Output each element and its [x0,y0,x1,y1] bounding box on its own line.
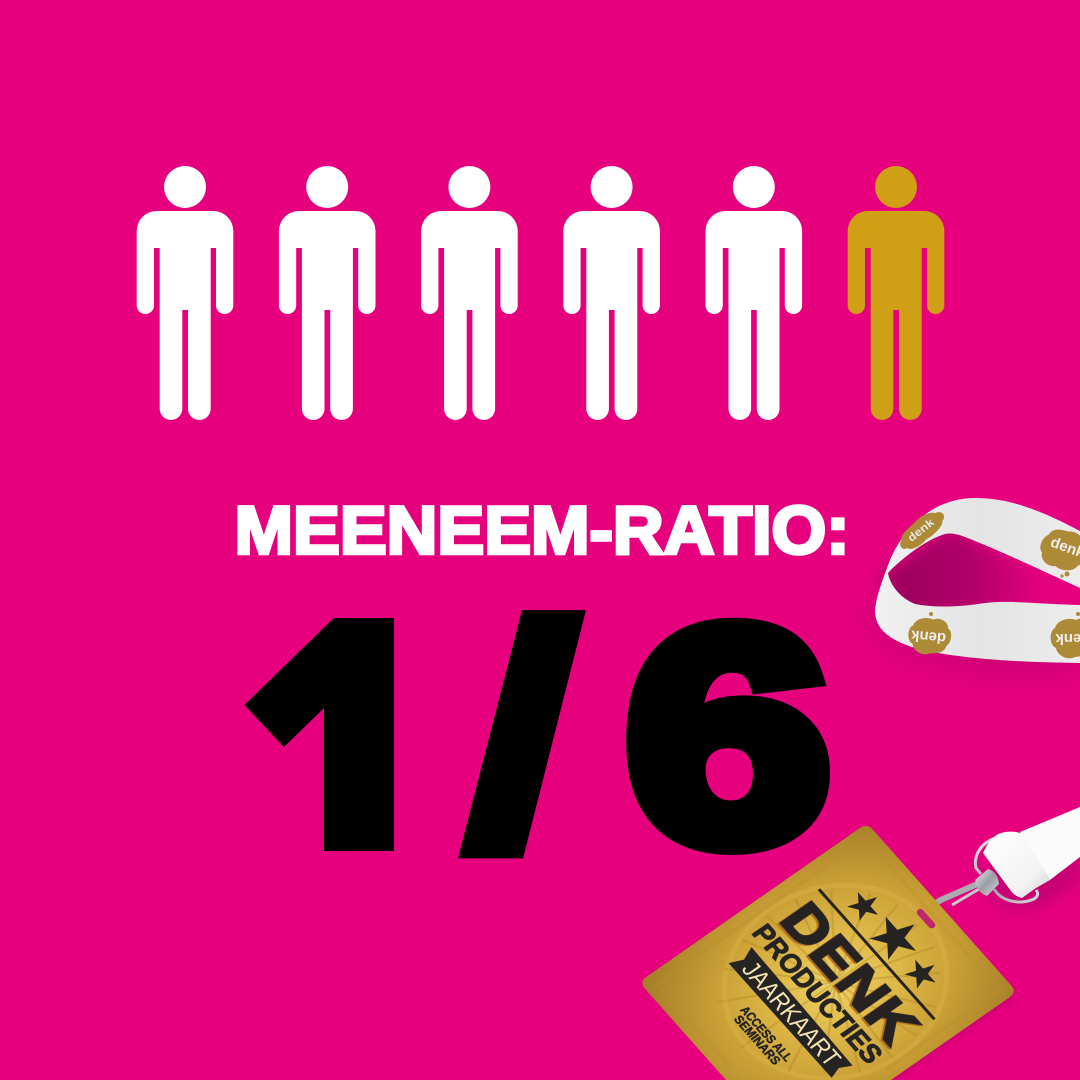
icon: person 6 gold [848,166,944,420]
badge subtitle PRODUCTIES: PRODUCTIES [746,919,889,1069]
big ratio number 1/6 [219,548,830,922]
lanyard logo: upper right [1035,523,1080,578]
lanyard strap and clip [924,807,1080,920]
metal ring [975,838,1038,902]
lanyard loop: denk [910,626,947,646]
icon: person 1 [137,166,233,420]
badge access text: SEMINARS [731,1013,783,1067]
big ratio number 1/6: 1 [219,548,479,922]
lanyard logo: lower right [1051,612,1080,658]
strap [1020,807,1080,880]
lanyard logo: upper left [894,505,950,555]
icon: person 4 [563,166,660,420]
icon: person 5 [706,166,802,420]
badge banner text: JAARKAART [736,957,846,1071]
badge divider line [818,888,936,1020]
lanyard loop: denk [906,516,937,545]
badge stars [840,880,954,994]
icon: person 2 [279,166,376,420]
badge slot [915,908,937,930]
people row: five white figures and one gold [137,166,944,420]
badge title DENK: DENK [768,892,932,1054]
folded strap end [983,832,1050,898]
badge access text: ACCESS ALL [737,1004,795,1064]
badge banner [729,947,855,1080]
metal hook [924,882,982,920]
big ratio number 1/6: 6 [626,567,830,906]
icon: person 3 [421,166,518,420]
heading: meeneem-ratio: MEENEEM-RATIO: [234,492,850,568]
lanyard logo: lower left [907,612,953,656]
metal swivel [975,869,999,896]
badge: Denk Producties jaarkaart [639,823,1018,1080]
big ratio number 1/6: / [462,557,583,915]
lanyard loop [868,498,1080,674]
